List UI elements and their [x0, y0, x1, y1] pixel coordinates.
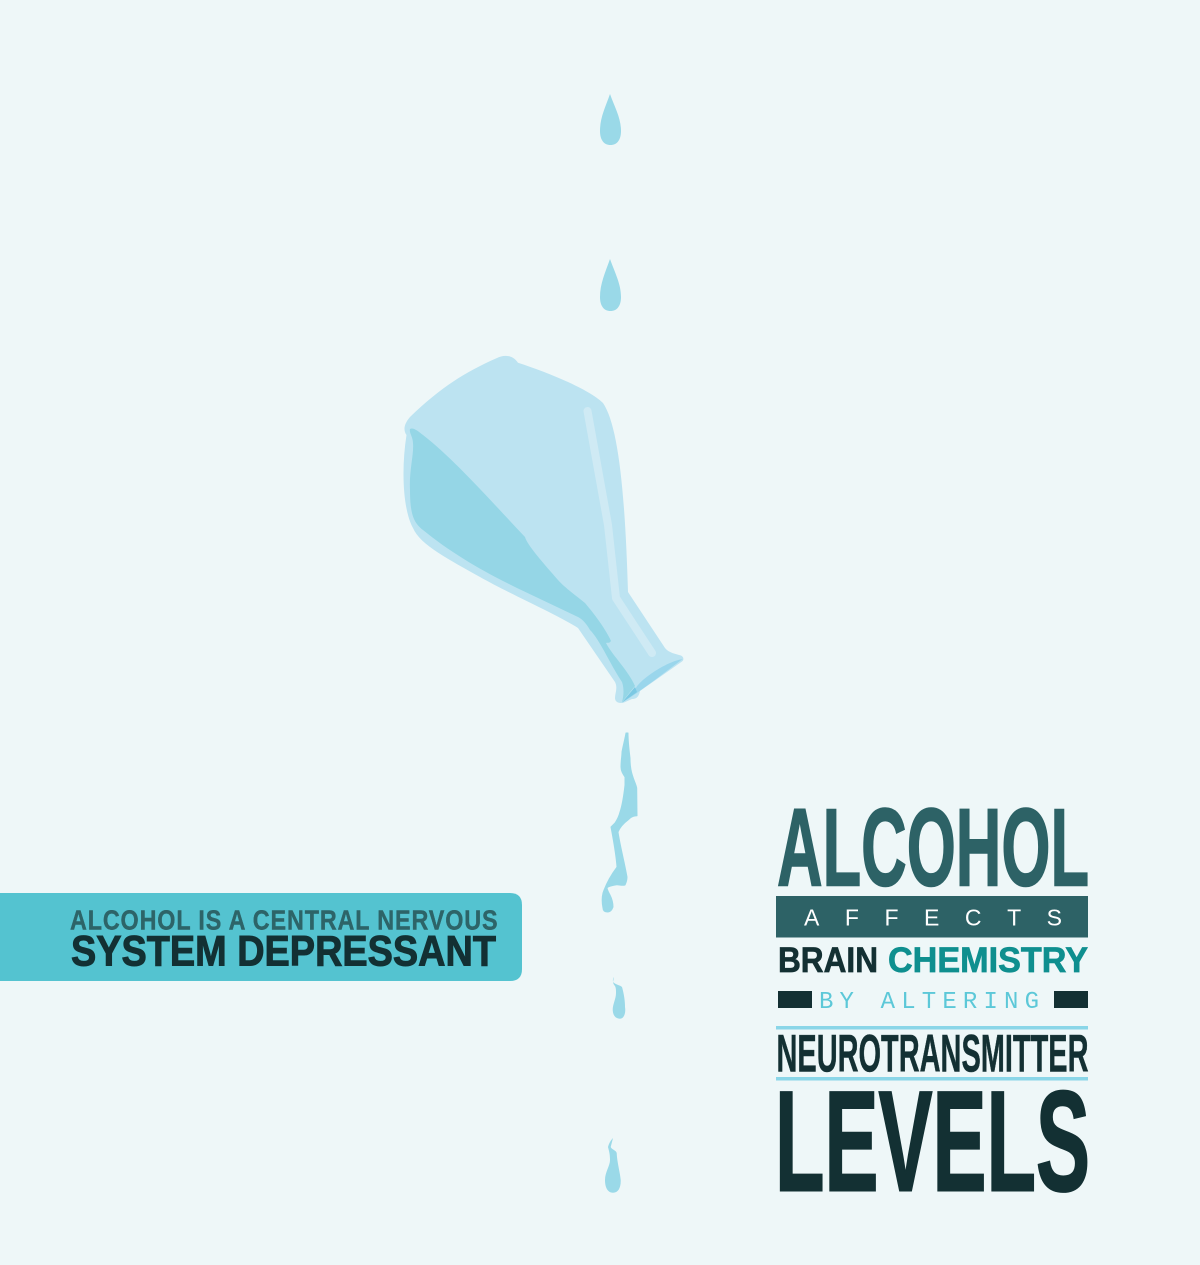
bottle body	[403, 356, 683, 703]
bar left of BY ALTERING	[778, 991, 812, 1008]
title block	[775, 786, 1090, 1222]
icon: pouring liquid stream	[602, 733, 637, 912]
icon: small drip 4	[605, 1138, 621, 1193]
bar: AFFECTS: AFFECTS	[804, 904, 1062, 930]
panel: banner callout	[0, 893, 522, 981]
liquid inside bottle	[410, 428, 635, 702]
icon: falling water drop 2	[600, 259, 621, 311]
rule above NEUROTRANSMITTER	[776, 1026, 1088, 1030]
icon: small drip 3	[613, 977, 625, 1019]
icon: tipped glass bottle	[403, 356, 683, 703]
rule below NEUROTRANSMITTER	[776, 1077, 1088, 1080]
bottle highlight	[588, 411, 652, 653]
text: BY ALTERING: BY ALTERING	[819, 989, 1039, 1016]
heading: CHEMISTRY: CHEMISTRY	[888, 941, 1088, 980]
banner background	[0, 893, 522, 981]
rim overlap	[622, 687, 637, 702]
bar: AFFECTS	[776, 896, 1088, 938]
banner line 2: SYSTEM DEPRESSANT	[71, 928, 496, 976]
bar right of BY ALTERING	[1054, 991, 1088, 1008]
icon: falling water drop 1	[600, 94, 621, 145]
bottle mouth rim	[622, 659, 683, 702]
heading: BRAIN: BRAIN	[778, 941, 878, 980]
banner line 1: ALCOHOL IS A CENTRAL NERVOUS	[70, 906, 498, 936]
